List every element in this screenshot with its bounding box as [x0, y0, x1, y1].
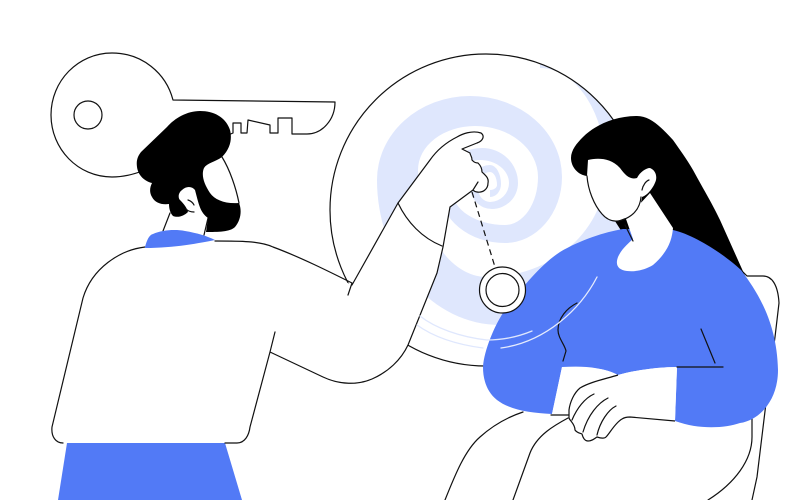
jaw outline: [587, 176, 641, 221]
neck and neck opening: [617, 193, 673, 271]
hypnotist: [52, 111, 488, 500]
patient: [445, 116, 779, 500]
motion lines: [417, 277, 597, 348]
pendulum string: [472, 192, 495, 267]
torso outline: [52, 132, 488, 443]
hand: [569, 375, 675, 441]
key: [51, 53, 335, 177]
blue lower body: [58, 443, 242, 500]
ear lines: [642, 180, 649, 190]
neck: [163, 190, 209, 237]
bent arm gap: [552, 367, 677, 421]
chair: [600, 270, 779, 500]
collar tick: [625, 225, 633, 241]
face and ear: [587, 159, 656, 221]
face: [222, 157, 239, 203]
key hole: [74, 101, 102, 129]
hair: [571, 116, 746, 278]
pendulum disc: [480, 267, 526, 313]
hair strand behind neck: [613, 218, 634, 240]
shirt lines: [551, 303, 723, 415]
hypnotic spiral disc: [329, 53, 642, 367]
legs: [445, 412, 752, 500]
collar: [145, 230, 215, 248]
hair and beard: [137, 111, 241, 232]
torso and pointing arm: [52, 132, 488, 443]
finger lines: [572, 394, 616, 435]
cuff line: [398, 203, 442, 246]
shirt: [483, 229, 778, 427]
ear detail: [186, 200, 194, 212]
